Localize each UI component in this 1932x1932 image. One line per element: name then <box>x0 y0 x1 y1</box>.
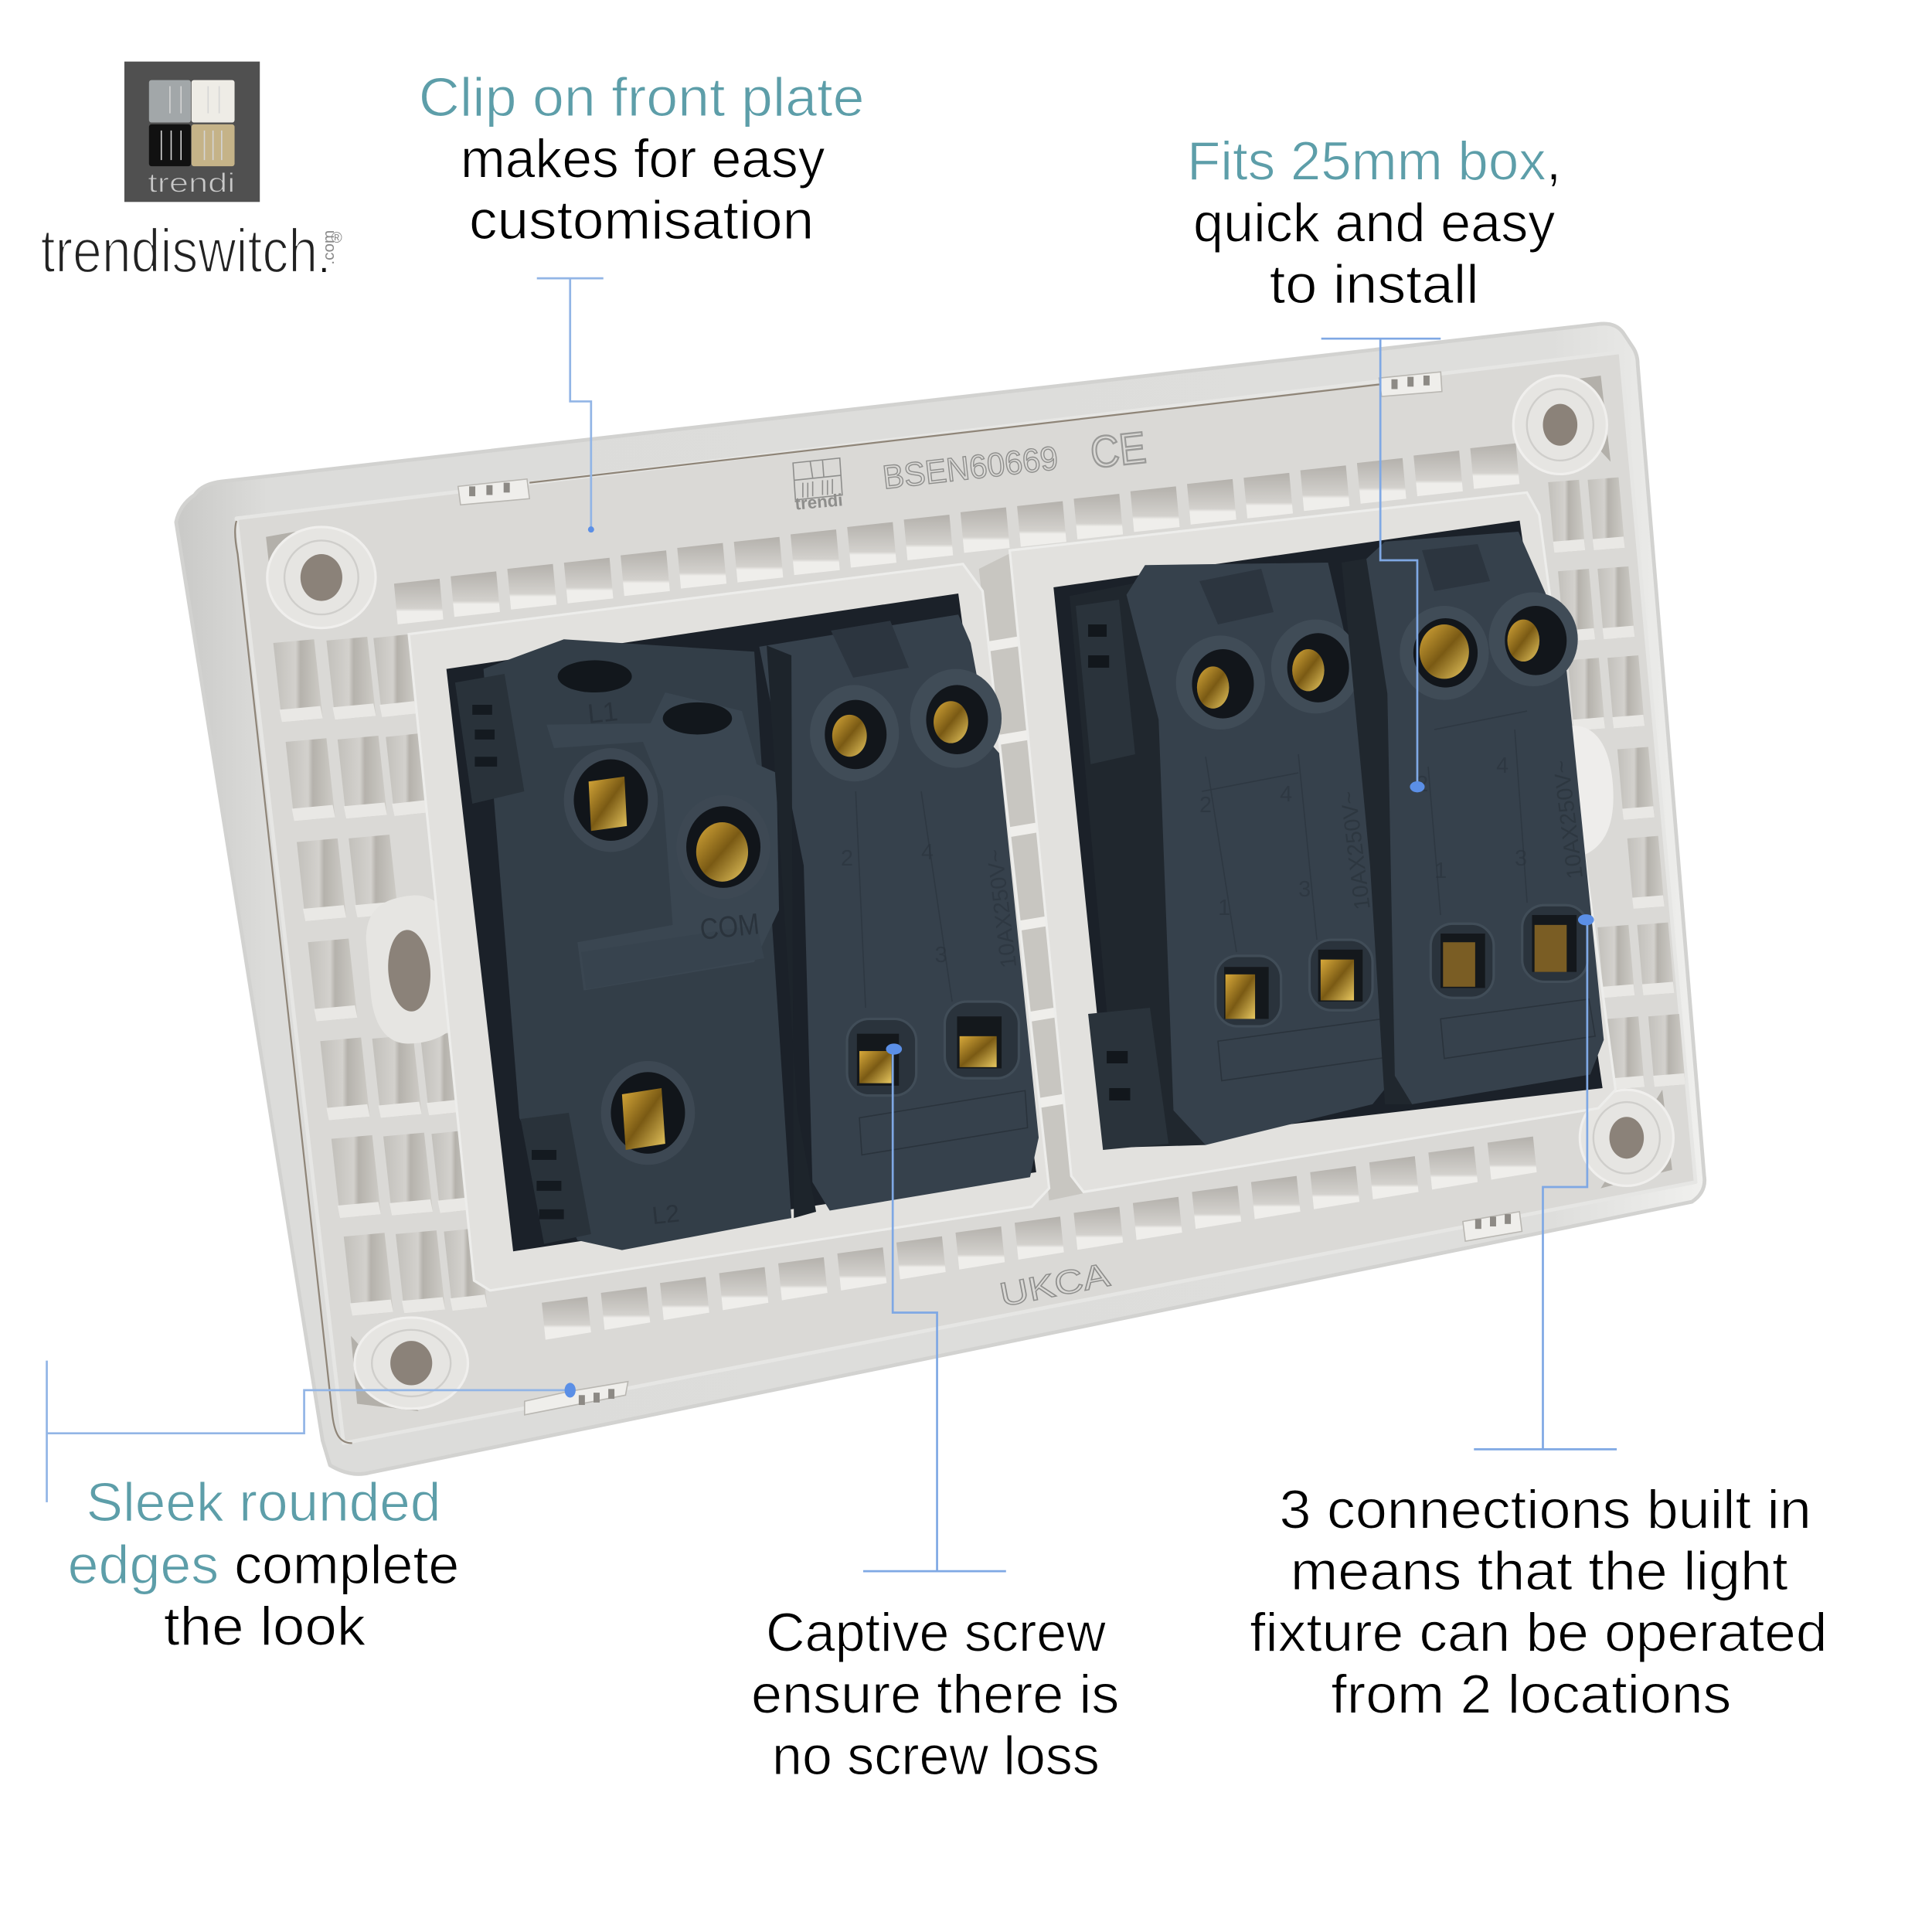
left window interior <box>447 594 1036 1251</box>
callout text: captive screw: Captive screw <box>766 1603 1106 1663</box>
callout text: clip on front plate <box>419 67 865 250</box>
logo: trendiswitch wordmark: trendiswitch <box>41 216 318 285</box>
right window module B: 2 <box>1416 772 1428 797</box>
callout text: 3 connections: from 2 locations <box>1331 1664 1731 1724</box>
callout text: captive screw: ensure there is <box>751 1664 1119 1724</box>
right window frame <box>1010 492 1616 1192</box>
callout text: sleek rounded edges: edges complete <box>68 1535 459 1595</box>
left rib cells <box>274 634 487 1315</box>
callout text: clip on front plate: customisation <box>469 190 814 250</box>
plate marking: CE: CE <box>1088 423 1148 478</box>
centre gap between windows with ribs <box>979 550 1090 1201</box>
right window module B <box>1342 532 1604 1104</box>
right rib cells <box>1548 478 1685 1090</box>
plate marking: UKCA: UKCA <box>997 1257 1113 1314</box>
corner screw bosses <box>266 376 1673 1411</box>
callout text: sleek rounded edges: Sleek rounded <box>87 1472 440 1532</box>
right window interior <box>1053 521 1603 1145</box>
seam lines <box>235 384 1382 1443</box>
side latches <box>455 674 591 1244</box>
plate marking: BSEN60669: BSEN60669 <box>881 440 1060 497</box>
wire entry slots <box>1216 940 1372 1026</box>
callout text: clip on front plate: Clip on front plate <box>419 67 865 128</box>
left window frame <box>409 564 1049 1291</box>
logo: trendiswitch wordmark: . <box>319 240 329 281</box>
logo: trendi square badge <box>124 62 260 202</box>
callout leader: clip on front plate <box>537 278 604 532</box>
right window module B: 10AX250V~ <box>1549 759 1588 880</box>
inner base <box>236 352 1696 1443</box>
window interiors and switch modules <box>447 521 1604 1251</box>
callout text: 3 connections: means that the light <box>1291 1541 1788 1601</box>
screw terminals <box>810 669 1002 781</box>
right window module A: 2 <box>1199 793 1212 818</box>
callout text: 3 connections: 3 connections built in <box>1280 1479 1811 1539</box>
right window module A: 3 <box>1298 877 1311 902</box>
raised terminal block <box>546 692 779 991</box>
callout text: 3 connections <box>1250 1479 1828 1724</box>
central oval mounting boss <box>366 895 460 1043</box>
right window module A <box>1070 563 1393 1150</box>
logo: trendiswitch wordmark: .com <box>320 230 338 265</box>
left large module: L1 COM L2: L1 <box>586 696 619 730</box>
screw terminals <box>1176 620 1360 730</box>
wire entry slots <box>847 1002 1019 1096</box>
logo: trendiswitch wordmark: ® <box>332 230 342 247</box>
terminal L2 <box>601 1061 695 1165</box>
right window module B: 4 <box>1496 753 1509 778</box>
callout text: sleek rounded edges <box>68 1472 459 1657</box>
callout text: fits 25mm box: quick and easy <box>1193 192 1555 253</box>
right window module A: 4 <box>1280 782 1292 807</box>
left window switch module <box>759 614 1039 1218</box>
callout text: captive screw <box>751 1603 1119 1786</box>
callout leader: 3 connections <box>1474 914 1617 1449</box>
callout text: clip on front plate: makes for easy <box>461 128 825 189</box>
left window switch module: 10AX250V~ <box>983 848 1022 969</box>
left window switch module: 4 <box>921 840 934 865</box>
logo: trendi square badge: trendi <box>148 168 235 199</box>
callout leader: captive screw <box>863 1043 1006 1571</box>
right window module B: 1 <box>1434 859 1447 883</box>
plate marking: trendi mark <box>793 458 843 514</box>
callout text: sleek rounded edges: the look <box>164 1597 366 1657</box>
clip notches <box>458 372 1522 1415</box>
top rib cells <box>394 444 1519 624</box>
terminal L1 <box>564 748 658 852</box>
callout text: captive screw: no screw loss <box>772 1726 1100 1786</box>
left large module: L1 COM L2: L2 <box>651 1199 681 1230</box>
wire entry slots <box>1430 905 1587 998</box>
callout text: fits 25mm box: Fits 25mm box, <box>1187 131 1561 192</box>
callout text: 3 connections: fixture can be operated <box>1250 1603 1828 1663</box>
left window switch module: 3 <box>935 943 947 968</box>
switch plate: rear view <box>176 324 1705 1474</box>
left large module: L1 COM L2: COM <box>699 907 761 947</box>
outer rim <box>176 324 1705 1474</box>
callout text: fits 25mm box: to install <box>1270 254 1479 315</box>
plate marking: trendi mark: trendi <box>794 490 843 514</box>
right oval boss <box>1564 726 1614 859</box>
bottom rib cells <box>542 1137 1537 1340</box>
right window module A: 1 <box>1218 896 1230 920</box>
callout leader: fits 25mm box <box>1321 338 1440 792</box>
callout text: fits 25mm box <box>1187 131 1561 315</box>
right window module A: 10AX250V~ <box>1336 790 1376 911</box>
screw terminals <box>1400 592 1578 700</box>
left window switch module: 2 <box>841 846 853 871</box>
left large module: L1 COM L2 <box>455 639 791 1250</box>
callout leader: sleek rounded edges <box>47 1361 576 1502</box>
cable slots <box>558 660 632 692</box>
right window module B: 3 <box>1515 846 1527 871</box>
terminal COM <box>676 795 770 899</box>
